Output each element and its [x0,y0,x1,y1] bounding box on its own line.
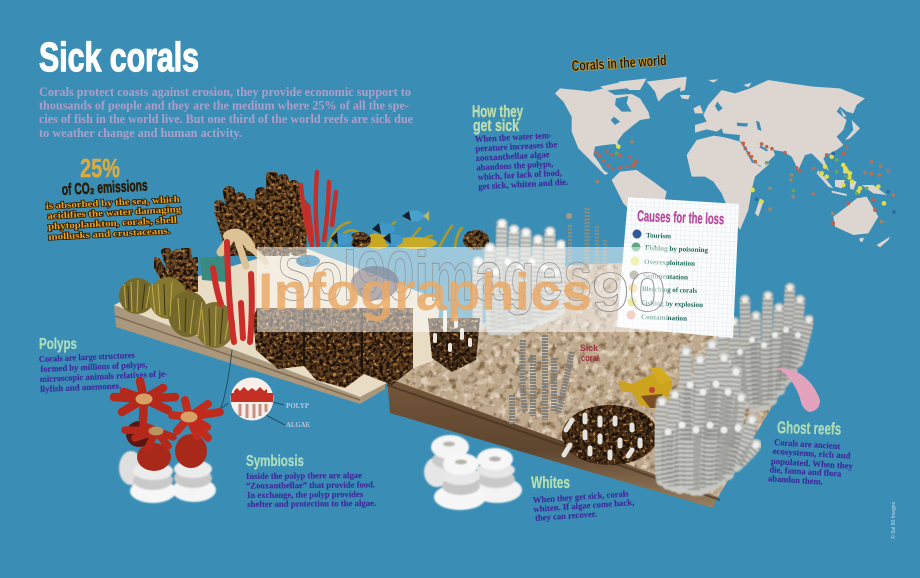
legend: contamination [626,310,687,323]
intro text: cies of fish in the world live. But one third of the world reefs are sick due [39,112,413,126]
callout: 25% of CO2 emissions [46,153,183,243]
text: zooxanthellae algae [476,149,550,163]
legend: tourism: Tourism [646,232,671,240]
heading: How they [472,102,523,121]
stack: back [424,435,469,487]
ghost coral front mass [660,345,756,490]
how they get sick [472,102,568,191]
back fish-side corals: brown and red [219,172,336,252]
olive seaweed clumps [119,277,235,348]
callout text: mollusks and crustaceans. [48,227,171,243]
blue fish group [331,210,429,246]
paper sheet [617,197,739,338]
text: get sick, whiten and die. [478,177,568,191]
paper heading: Causes for the loss [637,208,724,228]
text [532,488,635,523]
grey sick corals on sand [512,335,572,425]
white skeleton stacks [119,451,216,503]
white tips on brown coral [435,312,470,350]
watermark band [257,247,667,332]
polyp star: front [125,425,173,448]
polyp star: right [172,400,220,438]
world map: corals in the world [555,77,894,247]
text: which, for lack of food, [478,168,562,182]
label: polyp: POLYP [286,401,309,410]
watermark outlined name: Sol90images [277,237,592,315]
watermark outlined number: 90 [592,261,666,323]
text [246,470,376,509]
polyp star: rear left [114,381,175,420]
text: shelter and protection to the algae. [247,498,376,509]
text: When the water tem- [475,130,552,144]
stack: front [434,453,486,510]
right slab [387,262,792,508]
back brown coral [219,176,302,252]
red coral, foreground [213,242,252,342]
heading: Polyps [39,336,77,353]
callout heading: of CO₂ emissions [61,178,148,199]
legend: bleaching of corals: Bleaching of corals [642,285,697,295]
heading: get sick [473,116,519,135]
reef diagram [114,172,809,508]
intro text: Corals protect coasts against erosion, they provide economic support to [39,85,411,99]
legend: fishing by poisoning: Fishing by poisoning [645,244,709,254]
sick coral label: coral [581,353,599,364]
whites section [531,473,635,523]
legend: overexploitation [630,256,695,268]
text: Corals are large structures [39,350,136,364]
legend: sedimentation [630,270,688,282]
coral location dots [596,142,894,223]
small blue fish in band [296,255,320,267]
fish [331,232,353,245]
left brown clump and teal sponge [156,250,226,290]
intro text: thousands of people and they are the medium where 25% of all the spe- [39,98,409,112]
brown coral with whitening tips [562,405,658,465]
callout text: acidifies the water damaging [47,205,182,222]
callout text: phytoplankton, corals, shell [48,216,177,232]
text: Corals are ancient [774,437,840,451]
legend: fishing by explosion: Fishing by explosion [641,299,703,309]
legend: bleaching of corals [628,284,697,295]
ghost coral back mass [722,288,809,408]
legend: contamination: Contamination [641,313,687,323]
text: Inside the polyp there are algae [246,470,362,481]
text: microscopic animals relatives of je- [40,368,168,384]
illustration: bleached white polyps [424,435,522,510]
text: ecosystems, rich and [772,446,851,461]
heading: Symbiosis [246,453,304,470]
text: llyfish and anemones. [40,380,121,394]
legend: tourism [632,230,671,240]
copyright: © Sol 90 Images [890,502,897,539]
heading: corals in the world: Corals in the world [571,52,667,75]
front brown coral masses [253,308,480,388]
symbiosis section [221,350,376,509]
watermark name: Infographics [258,263,592,322]
text: abandon them. [768,473,823,487]
yellow and brown coral patches [349,230,489,250]
text: populated. When they [771,456,854,471]
title: Sick corals [39,34,199,80]
legend: sedimentation: Sedimentation [643,272,688,282]
label: algae: ALGAE [286,420,310,429]
dusky reef shadow in band [351,266,399,300]
map: Americas [555,77,690,217]
text [475,129,568,191]
sick coral label: Sick [580,343,599,354]
map: Europe, Asia, Africa, Australia [680,77,890,247]
fish [402,210,429,222]
heading: Whites [531,473,570,492]
paper: causes for the loss [617,197,739,338]
legend: fishing by poisoning [632,242,709,254]
big number: 25% [80,153,120,183]
red polyp bodies [126,421,207,471]
text: whiten. If algae come back, [533,497,635,514]
yellow fish [618,367,672,410]
text: abandons the polyps, [476,158,553,172]
left slab [114,246,440,404]
callout text [46,195,183,243]
illustration: healthy polyps on white stacks [114,381,220,503]
magnified polyp circle [230,378,274,420]
back red coral [301,172,336,245]
intro text: to weather change and human activity. [39,126,242,140]
text: they can recover. [535,509,597,523]
yellow reef strands [328,222,462,247]
text: When they get sick, corals [532,488,629,505]
ghost reefs section [768,418,855,488]
polyps section [39,336,168,394]
heading: Ghost reefs [777,418,841,439]
fish [383,233,403,246]
text [768,437,855,488]
fish [372,223,395,235]
callout text: is absorbed by the sea, which [46,195,181,212]
pink arrow to ghost reefs [777,368,820,412]
heading [472,102,523,135]
sick coral label [580,343,599,364]
text [39,348,168,394]
tan starfish [221,234,266,266]
connector lines [221,350,285,425]
stack: right [472,448,522,503]
white coral columns, back of right slab [477,224,561,330]
watermark [257,237,667,332]
text: In exchange, the polyp provides [247,489,364,500]
intro text [39,85,413,140]
text: perature increases the [475,139,558,153]
text: formed by millions of polyps, [40,359,147,374]
grey ladder corals, back [566,208,605,268]
text: die, fauna and flora [769,464,842,479]
legend: overexploitation: Overexploitation [644,258,695,268]
text: “Zooxanthellae” that provide food. [246,479,375,490]
